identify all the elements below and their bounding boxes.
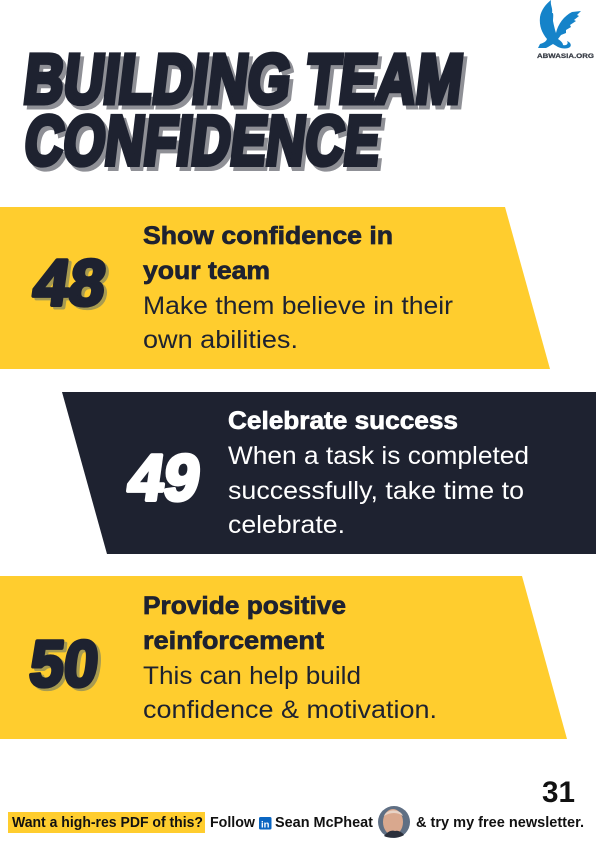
title: BUILDING TEAM [23, 43, 471, 122]
number 49: 49 [124, 441, 205, 514]
highlighted question: Want a high-res PDF of this? [12, 815, 203, 831]
number 50: 50 [29, 630, 105, 702]
body text [228, 442, 529, 539]
follow text: Follow [210, 815, 256, 831]
footer call to action [8, 806, 584, 838]
body text: confidence & motivation. [143, 696, 437, 724]
body text [143, 292, 453, 354]
body text: successfully, take time to [228, 477, 524, 505]
body text: When a task is completed [228, 442, 529, 470]
panel: tip 50 [0, 576, 567, 739]
title: CONFIDENCE [21, 101, 385, 179]
heading: celebrate success: Celebrate success [228, 407, 458, 435]
number 48: 48 [29, 246, 110, 319]
author photo [378, 806, 410, 838]
title: BUILDING TEAM [20, 39, 467, 118]
body text [143, 662, 437, 724]
heading: provide positive reinforcement [143, 592, 346, 655]
heading: provide positive reinforcement: Provide positive [143, 592, 346, 620]
number 48: 48 [32, 249, 113, 321]
author name: Sean McPheat [275, 815, 373, 831]
icon: linkedin [259, 817, 272, 830]
number 50: 50 [26, 627, 102, 700]
page number: 31 [542, 776, 575, 809]
panel: tip 48 [0, 207, 550, 369]
title: CONFIDENCE [24, 105, 388, 183]
heading: show confidence: Show confidence in [143, 222, 393, 250]
heading: show confidence: your team [143, 257, 270, 285]
body text: own abilities. [143, 326, 298, 354]
title [13, 39, 471, 183]
panel: tip 49 [62, 392, 596, 554]
newsletter text: & try my free newsletter. [416, 815, 584, 831]
logo: abwasia.org griffin [537, 0, 594, 60]
logo: abwasia.org griffin: ABWASIA.ORG [537, 53, 594, 60]
heading: show confidence [143, 222, 393, 285]
body text: Make them believe in their [143, 292, 453, 320]
icon: linkedin: in [261, 820, 270, 830]
body text: This can help build [143, 662, 361, 690]
body text: celebrate. [228, 511, 345, 539]
heading: provide positive reinforcement: reinforcement [143, 627, 325, 655]
